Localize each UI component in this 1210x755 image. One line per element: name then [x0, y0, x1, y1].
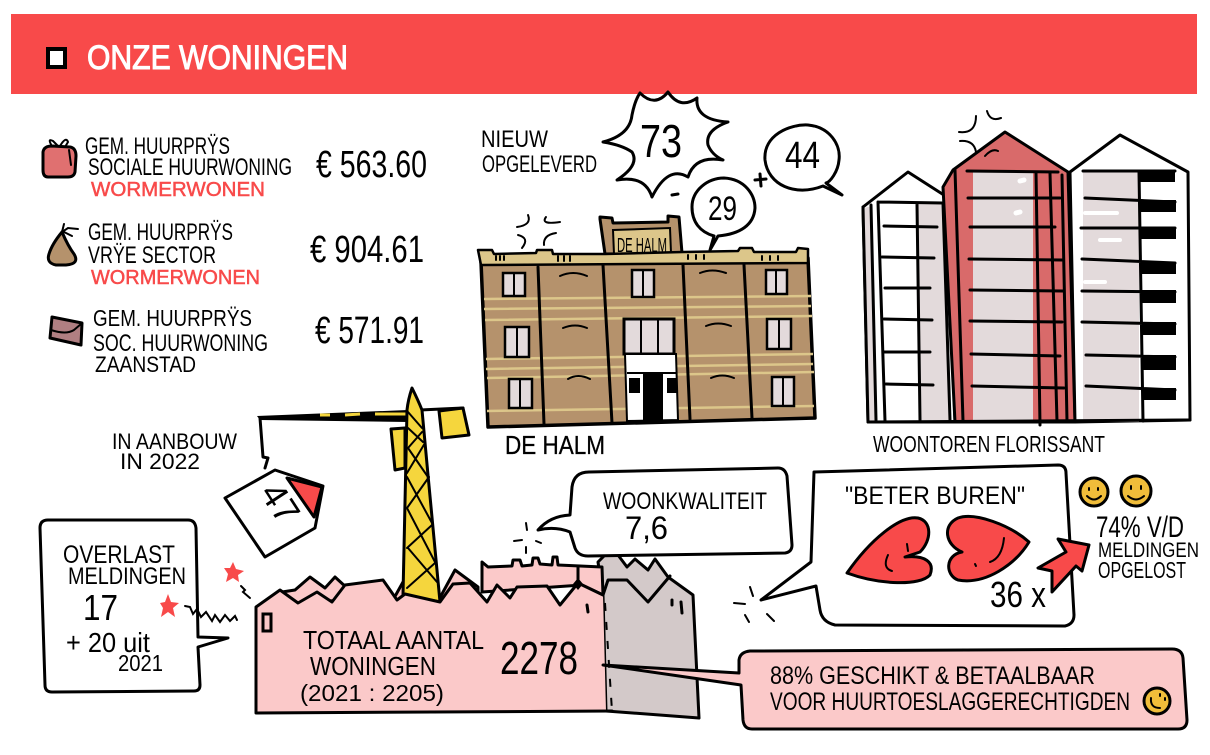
text: totaal aantal woningen: TOTAAL AANTAL: [303, 625, 484, 655]
count: 36x: 36 x: [990, 574, 1046, 615]
building sign: DE HALM: [617, 235, 667, 257]
callout: beter buren: [761, 465, 1074, 626]
label: nieuw opgeleverd: NIEUW: [481, 126, 548, 153]
label: nieuw opgeleverd: OPGELEVERD: [482, 151, 597, 178]
callout: overlast meldingen: 2021: [118, 650, 163, 676]
spark marks: [514, 523, 541, 553]
text: social rent Zaanstad: ZAANSTAD: [95, 352, 196, 377]
back pink block: [482, 557, 603, 595]
callout: overlast meldingen: [40, 520, 228, 692]
header banner: [11, 14, 1197, 94]
label: nieuw opgeleverd: [481, 126, 597, 178]
grey building: [598, 555, 699, 718]
callout: bubble 29: [692, 178, 755, 250]
flag block: [439, 408, 469, 438]
label: in aanbouw: [112, 429, 237, 474]
callout: overlast meldingen: MELDINGEN: [68, 563, 186, 590]
closed shutters arcs: [560, 270, 734, 379]
label: Woontoren Florissant: WOONTOREN FLORISSANT: [873, 431, 1105, 457]
illustration: hanging house 47: 47: [252, 475, 308, 531]
illustration: De Halm building: [478, 215, 815, 427]
back roof peaks: [282, 577, 347, 605]
hook: [260, 418, 268, 468]
peaks beside crane: [393, 570, 478, 605]
callout: overlast meldingen: OVERLAST: [63, 541, 175, 569]
text: free sector WormerWonen: WORMERWONEN: [91, 267, 260, 289]
jib arm: [257, 410, 408, 422]
left tower: [863, 172, 955, 422]
text: totaal aantal woningen: WONINGEN: [310, 651, 436, 681]
dashed wall line: [605, 603, 612, 711]
price 3: € 571.91: [315, 310, 424, 352]
text: social rent WormerWonen: SOCIALE HUURWONING: [88, 154, 292, 181]
icon: smiley right: [1121, 476, 1151, 506]
illustration: front pink building: [256, 567, 682, 713]
illustration: Woontoren Florissant: [863, 111, 1190, 425]
text: social rent WormerWonen: [85, 133, 292, 201]
icon: red arrow: [1038, 539, 1089, 592]
text: social rent WormerWonen: GEM. HUURPRŸS: [85, 133, 230, 160]
panel: rent prices: [43, 133, 427, 377]
callout: 88% geschikt: 88% GESCHIKT & BETAALBAAR: [770, 662, 1095, 690]
icon: smiley: [1144, 688, 1170, 714]
windows: [503, 270, 794, 408]
callout: beter buren: "BETER BUREN": [845, 482, 1025, 510]
small door: [263, 614, 271, 631]
label: De Halm: DE HALM: [505, 430, 605, 460]
title: ONZE WONINGEN: [87, 39, 348, 77]
minus sign: [672, 194, 678, 195]
callout: bubble 44: [765, 125, 842, 195]
entrance door: [624, 319, 678, 421]
text: social rent Zaanstad: SOC. HUURWONING: [93, 330, 268, 357]
text: free sector WormerWonen: [88, 219, 260, 289]
black balconies: [1138, 170, 1176, 400]
icon: header square: [48, 49, 65, 67]
number: 2278: 2278: [500, 632, 578, 684]
callout: woonkwaliteit: [538, 468, 792, 556]
roof sparks: [517, 215, 560, 248]
text: free sector WormerWonen: VRŸE SECTOR: [88, 242, 216, 269]
plus sign: [755, 174, 766, 186]
label: in aanbouw: IN AANBOUW: [112, 429, 237, 454]
icon: purse: [50, 317, 82, 345]
text: totaal aantal woningen: [300, 625, 484, 706]
callout: 88% geschikt: [603, 649, 1187, 729]
callout: woonkwaliteit: WOONKWALITEIT: [603, 488, 767, 515]
illustration: back buildings: [282, 555, 699, 718]
callout: bubble 29: 29: [708, 190, 737, 228]
icon: right heart: [947, 517, 1029, 581]
icon: smiley left: [1080, 478, 1108, 506]
price 2: € 904.61: [310, 229, 424, 271]
callout: woonkwaliteit: 7,6: [625, 510, 668, 546]
spark marks: [959, 111, 1001, 152]
middle tower: [943, 132, 1075, 425]
right tower: [1070, 135, 1190, 422]
text: social rent Zaanstad: [93, 305, 268, 377]
label: in aanbouw: IN 2022: [120, 449, 200, 474]
noise stars and zigzags: [160, 562, 250, 622]
icon: red bag: [43, 140, 76, 177]
building outline: [256, 580, 612, 713]
illustration: hanging house 47: [225, 470, 323, 557]
illustration: crane: [257, 388, 469, 602]
text: totaal aantal woningen: (2021 : 2205): [300, 680, 444, 706]
callout: bubble 44: 44: [785, 135, 820, 177]
icon: brown pouch: [48, 224, 78, 265]
text: free sector WormerWonen: GEM. HUURPRŸS: [88, 219, 233, 246]
callout: overlast meldingen: + 20 uit: [66, 627, 150, 658]
spark marks: [734, 587, 774, 622]
text: social rent WormerWonen: WORMERWONEN: [91, 179, 265, 201]
counterweight: [391, 428, 405, 470]
callout: overlast meldingen: 17: [83, 587, 118, 628]
text: 74% opgelost: [1096, 511, 1199, 583]
callout: burst 73: 73: [640, 115, 682, 167]
price 1: € 563.60: [316, 144, 427, 186]
mast: [403, 388, 440, 602]
text: social rent Zaanstad: GEM. HUURPRŸS: [93, 305, 252, 331]
callout: burst 73: [603, 92, 728, 197]
icon: left heart: [847, 518, 931, 583]
